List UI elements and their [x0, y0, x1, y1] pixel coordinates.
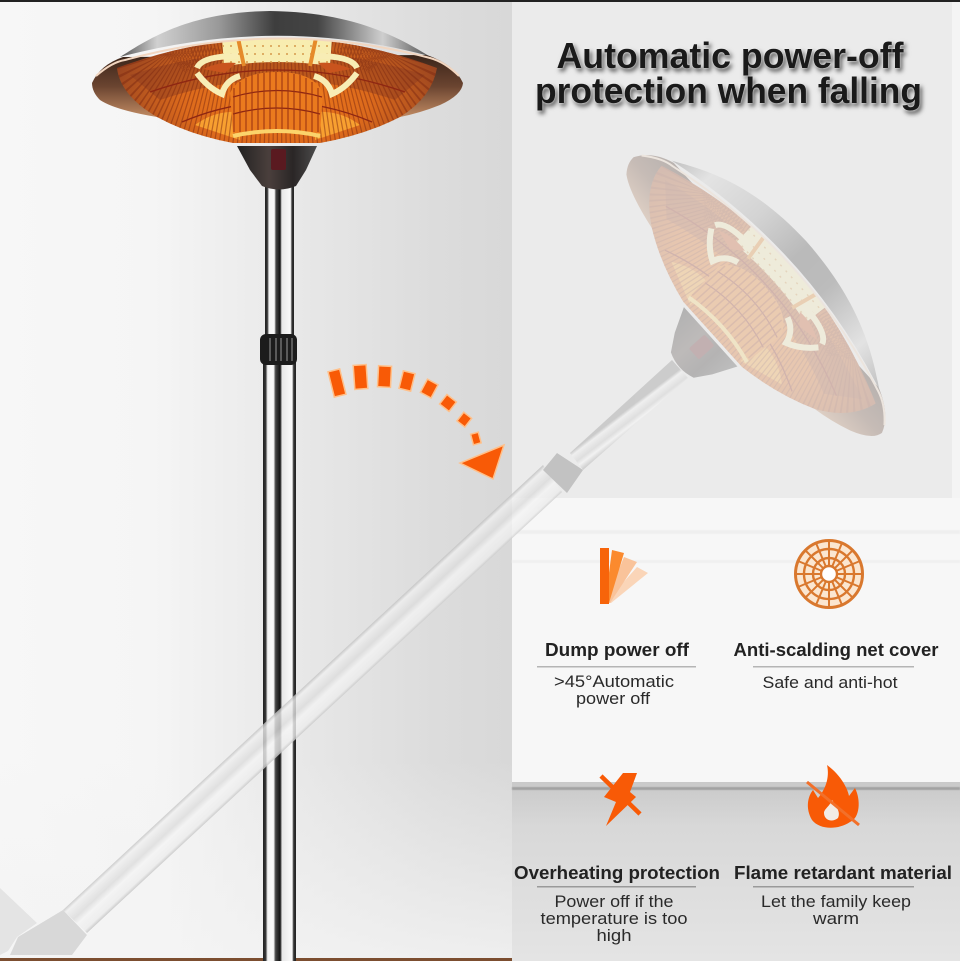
base wedge: [0, 888, 37, 955]
feature: overheating protection: high: [596, 927, 632, 945]
feature: overheating protection: temperature is too: [540, 910, 688, 928]
heater glowing element: [100, 5, 460, 150]
icon: overheating protection: [601, 773, 640, 826]
background: lower wall light: [0, 760, 512, 958]
feature: dump power off: power off: [576, 690, 650, 708]
title: [535, 35, 922, 111]
icon: dump power off: [600, 548, 648, 604]
background: upper right wall: [512, 0, 960, 498]
background: right lower floor: [512, 782, 960, 961]
background: floor strip: [0, 958, 512, 961]
ghost heater pole: [0, 360, 688, 955]
arrow: falling direction: [328, 365, 504, 479]
icon: anti-scalding net: [795, 540, 863, 608]
feature: flame retardant material: Let the family keep: [761, 893, 911, 911]
lower collar: [10, 910, 87, 955]
title: Automatic power-off: [556, 35, 904, 76]
feature: anti-scalding net cover: Safe and anti-hot: [762, 674, 898, 692]
feature: flame retardant material: warm: [812, 910, 859, 928]
feature: flame retardant material: [734, 863, 952, 928]
center cone: [230, 72, 323, 133]
upper collar: [543, 453, 583, 493]
heater pole: [260, 185, 297, 961]
heater upright: [92, 5, 463, 961]
heater rim highlight: [96, 38, 459, 76]
background: right white panel: [512, 498, 960, 782]
feature: overheating protection: Overheating protection: [514, 863, 720, 883]
background: right edge of wall: [952, 0, 960, 498]
heater control base: [237, 146, 317, 190]
feature: dump power off: [537, 640, 696, 708]
background: left wall: [0, 0, 512, 961]
icon: flame retardant: [807, 765, 859, 828]
glowing lobes: [222, 38, 332, 66]
feature: dump power off: Dump power off: [545, 640, 690, 660]
feature: anti-scalding net cover: Anti-scalding net cover: [734, 640, 938, 660]
heater rim: [92, 55, 463, 117]
feature: dump power off: >45°Automatic: [554, 673, 674, 691]
feature: overheating protection: [514, 863, 720, 945]
ghost heater head: [555, 105, 940, 504]
heater head: [92, 5, 463, 190]
title: protection when falling: [535, 70, 922, 111]
feature: anti-scalding net cover: [734, 640, 938, 692]
feature: flame retardant material: Flame retardant material: [734, 863, 952, 883]
feature: overheating protection: Power off if the: [554, 893, 674, 911]
heater dome: [120, 11, 429, 57]
